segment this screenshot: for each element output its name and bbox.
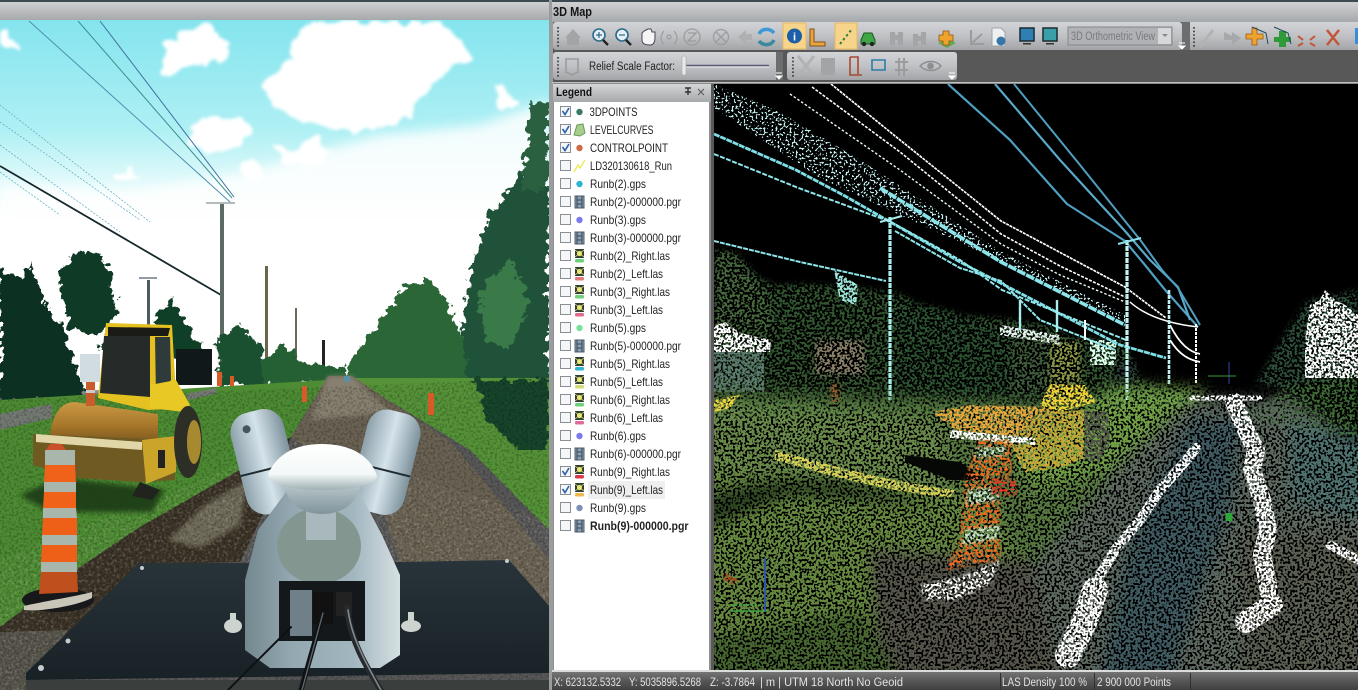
icon: info highlighted: i xyxy=(793,32,796,44)
strip below plate xyxy=(26,680,550,690)
ground point cloud xyxy=(700,385,1358,680)
sensor main body xyxy=(245,484,400,668)
icon: building disabled xyxy=(821,58,835,75)
scattered wire band xyxy=(714,84,1125,322)
icon: eye disabled xyxy=(920,62,941,70)
row: Runb(2)-000000.pgr xyxy=(560,195,681,209)
panel: camera photo of the road xyxy=(0,20,550,690)
row: Runb(5)_Left.las xyxy=(560,375,663,389)
row: Runb(3).gps xyxy=(560,213,646,227)
row: Runb(9)_Left.las: Runb(9)_Left.las xyxy=(590,483,663,497)
distant car xyxy=(344,376,350,382)
trench xyxy=(0,437,291,690)
power lines xyxy=(0,21,234,295)
separator under toolbars xyxy=(552,82,1358,84)
row: Runb(3)_Left.las xyxy=(560,303,663,317)
cables xyxy=(228,607,382,690)
label: relief scale factor: Relief Scale Factor: xyxy=(589,61,675,73)
icon: zoom out xyxy=(616,29,631,45)
selected row highlight xyxy=(588,481,665,499)
poles point cloud xyxy=(880,216,1196,400)
legend header: Legend xyxy=(556,85,592,99)
legend list xyxy=(554,102,709,671)
panel divider xyxy=(549,0,553,690)
row: Runb(3)_Right.las xyxy=(560,285,670,299)
icon: blue rectangle xyxy=(872,60,885,70)
icon: axes disabled xyxy=(971,30,984,44)
row: Runb(3)-000000.pgr: Runb(3)-000000.pgr xyxy=(590,231,681,245)
row: Runb(9)_Left.las xyxy=(560,483,663,497)
mounting bolts xyxy=(224,612,421,633)
roller shadow point cloud xyxy=(905,455,985,480)
icon: overflow left xyxy=(776,73,782,79)
icon: cross disabled xyxy=(798,56,814,76)
connector panel xyxy=(279,581,365,641)
row: Runb(6).gps: Runb(6).gps xyxy=(590,429,646,443)
row: Runb(2).gps: Runb(2).gps xyxy=(590,177,646,191)
row: Runb(5)_Right.las: Runb(5)_Right.las xyxy=(590,357,670,371)
red specks xyxy=(722,572,738,585)
distant cones xyxy=(217,372,434,415)
row: CONTROLPOINT xyxy=(560,141,669,155)
sensor recess xyxy=(277,508,361,584)
far paved road xyxy=(0,388,216,430)
left scanner head xyxy=(230,409,290,514)
icon: pencil disabled xyxy=(1200,30,1213,47)
gravel road xyxy=(291,376,549,610)
icon: globe disabled xyxy=(714,30,728,44)
trees xyxy=(0,100,549,400)
row: Runb(2).gps xyxy=(560,177,646,191)
trailer and white shed xyxy=(80,349,212,385)
gps antenna bowl xyxy=(284,484,361,514)
white tree and building point cloud xyxy=(714,270,1358,392)
icon: red polyline xyxy=(850,57,862,75)
icon: back arrow disabled xyxy=(738,30,752,44)
icon: home xyxy=(565,29,581,45)
roller wheel xyxy=(174,406,202,478)
right grass verge xyxy=(352,378,549,530)
left grass xyxy=(0,380,326,627)
icon: expand arrows xyxy=(1327,30,1339,45)
background buildings and yellow dots xyxy=(815,340,1135,404)
status: z coordinate: Z: -3.7864 xyxy=(710,677,756,689)
row: Runb(3)_Right.las: Runb(3)_Right.las xyxy=(590,285,670,299)
icon: document settings xyxy=(992,28,1006,46)
combo box: view mode xyxy=(1068,27,1172,45)
control point marker xyxy=(1226,513,1232,521)
power lines point cloud xyxy=(714,84,1200,362)
white road tracks point cloud xyxy=(1068,398,1358,655)
utility poles xyxy=(139,202,325,386)
roller point cloud xyxy=(714,384,1110,497)
row: Runb(9)_Right.las: Runb(9)_Right.las xyxy=(590,465,670,479)
row: Runb(9)-000000.pgr xyxy=(560,519,689,533)
combo box: view mode: 3D Orthometric View xyxy=(1071,31,1156,43)
roller frame xyxy=(33,434,175,482)
icon: add vertex xyxy=(1246,27,1268,45)
row: Runb(3).gps: Runb(3).gps xyxy=(590,213,646,227)
row: Runb(3)-000000.pgr xyxy=(560,231,681,245)
icon: binoculars puzzle disabled xyxy=(913,32,926,46)
row: Runb(5).gps: Runb(5).gps xyxy=(590,321,646,335)
row: Runb(5).gps xyxy=(560,321,646,335)
row: Runb(6)_Left.las: Runb(6)_Left.las xyxy=(590,411,663,425)
right scanner head xyxy=(359,410,420,515)
panel: legend xyxy=(553,84,711,671)
row: Runb(5)_Right.las xyxy=(560,357,670,371)
row: 3DPOINTS: 3DPOINTS xyxy=(590,105,638,119)
row: Runb(5)-000000.pgr: Runb(5)-000000.pgr xyxy=(590,339,681,353)
striped traffic cone xyxy=(22,444,94,612)
row: Runb(5)-000000.pgr xyxy=(560,339,681,353)
plate bolts xyxy=(38,559,509,671)
icon: hand xyxy=(642,29,655,45)
slider xyxy=(682,56,769,75)
row: Runb(6)_Right.las xyxy=(560,393,670,407)
road roller xyxy=(20,323,202,512)
icon: zoom in xyxy=(593,29,608,45)
row: Runb(2)_Left.las: Runb(2)_Left.las xyxy=(590,267,663,281)
row: Runb(2)-000000.pgr: Runb(2)-000000.pgr xyxy=(590,195,681,209)
row: 3DPOINTS xyxy=(560,105,638,119)
row: Runb(9).gps: Runb(9).gps xyxy=(590,501,646,515)
row: Runb(6)_Left.las xyxy=(560,411,663,425)
icon: node arrow disabled xyxy=(1224,32,1241,45)
icon: monitor collapse xyxy=(1043,28,1057,44)
toolbar row one xyxy=(553,22,1358,50)
row: LEVELCURVES xyxy=(560,123,654,137)
row: Runb(9)-000000.pgr: Runb(9)-000000.pgr xyxy=(590,519,689,533)
icon: ruler xyxy=(810,29,825,46)
icon: move vertex xyxy=(1274,27,1291,47)
separator above status bar xyxy=(552,670,1358,672)
icon: relief hand disabled xyxy=(566,59,578,75)
status bar xyxy=(552,672,1358,690)
cone base xyxy=(22,588,94,612)
icon: toolbar clipped blue xyxy=(1355,28,1358,44)
sensor stem xyxy=(306,510,336,540)
icon: car xyxy=(861,33,875,46)
icon: toolbar overflow xyxy=(1179,43,1185,49)
icon: zoom selection disabled xyxy=(684,29,700,45)
clouds xyxy=(0,22,518,180)
low white haze xyxy=(0,100,549,390)
window title bar xyxy=(552,0,1358,22)
icon: delete vertices xyxy=(1298,36,1315,46)
row: Runb(3)_Left.las: Runb(3)_Left.las xyxy=(590,303,663,317)
icon: binoculars disabled xyxy=(890,32,903,45)
row: LD320130618_Run xyxy=(560,159,672,173)
icon: zoom extents disabled xyxy=(661,31,677,44)
row: Runb(9)_Right.las xyxy=(560,465,670,479)
panel: 3D point cloud view xyxy=(700,84,1358,680)
icon: overflow right xyxy=(949,73,955,79)
grips xyxy=(558,27,1194,47)
roller cab xyxy=(98,323,176,410)
row: CONTROLPOINT: CONTROLPOINT xyxy=(590,141,669,155)
icon: sync xyxy=(759,29,774,45)
toolbar row two xyxy=(553,52,957,80)
icon: line tool highlighted xyxy=(835,23,857,49)
row: Runb(2)_Right.las: Runb(2)_Right.las xyxy=(590,249,670,263)
row: Runb(5)_Left.las: Runb(5)_Left.las xyxy=(590,375,663,389)
left panel title bar xyxy=(0,0,550,20)
row: Runb(6)-000000.pgr: Runb(6)-000000.pgr xyxy=(590,447,681,461)
window title: 3D Map xyxy=(553,5,592,19)
row: Runb(2)_Right.las xyxy=(560,249,670,263)
legend header xyxy=(553,84,711,102)
row: Runb(6)-000000.pgr xyxy=(560,447,681,461)
status: LAS density: LAS Density 100 % xyxy=(1002,677,1087,689)
row: Runb(9).gps xyxy=(560,501,646,515)
small orange cone behind roller xyxy=(86,382,95,406)
status: points count: 2 900 000 Points xyxy=(1097,677,1171,689)
sky xyxy=(0,20,549,390)
row: LD320130618_Run: LD320130618_Run xyxy=(590,159,672,173)
shrubs right xyxy=(470,376,549,450)
status: coordinates: X: 623132.5332 xyxy=(554,677,621,689)
traffic cone point cloud xyxy=(920,440,1018,600)
distant axes marker xyxy=(1208,362,1236,384)
foreground axes marker xyxy=(731,558,765,612)
icon: monitor expand xyxy=(1020,28,1034,44)
row: Runb(6)_Right.las: Runb(6)_Right.las xyxy=(590,393,670,407)
icon: grid disabled xyxy=(895,58,908,76)
row: LEVELCURVES: LEVELCURVES xyxy=(590,123,654,137)
roller drum xyxy=(50,402,158,439)
status: y coordinate: Y: 5035896.5268 xyxy=(629,677,701,689)
icon: add layers xyxy=(938,31,956,48)
roller shadow xyxy=(20,478,165,512)
panel: 3D Map window xyxy=(552,0,1358,690)
row: Runb(2)_Left.las xyxy=(560,267,663,281)
vegetation point cloud xyxy=(714,250,1358,440)
black mounting plate xyxy=(26,560,550,680)
row: Runb(6).gps xyxy=(560,429,646,443)
ground texture xyxy=(0,378,549,690)
gps antenna dome xyxy=(268,444,377,490)
icon: info highlighted xyxy=(783,23,806,49)
status: projection: | m | UTM 18 North No Geoid xyxy=(760,677,903,689)
